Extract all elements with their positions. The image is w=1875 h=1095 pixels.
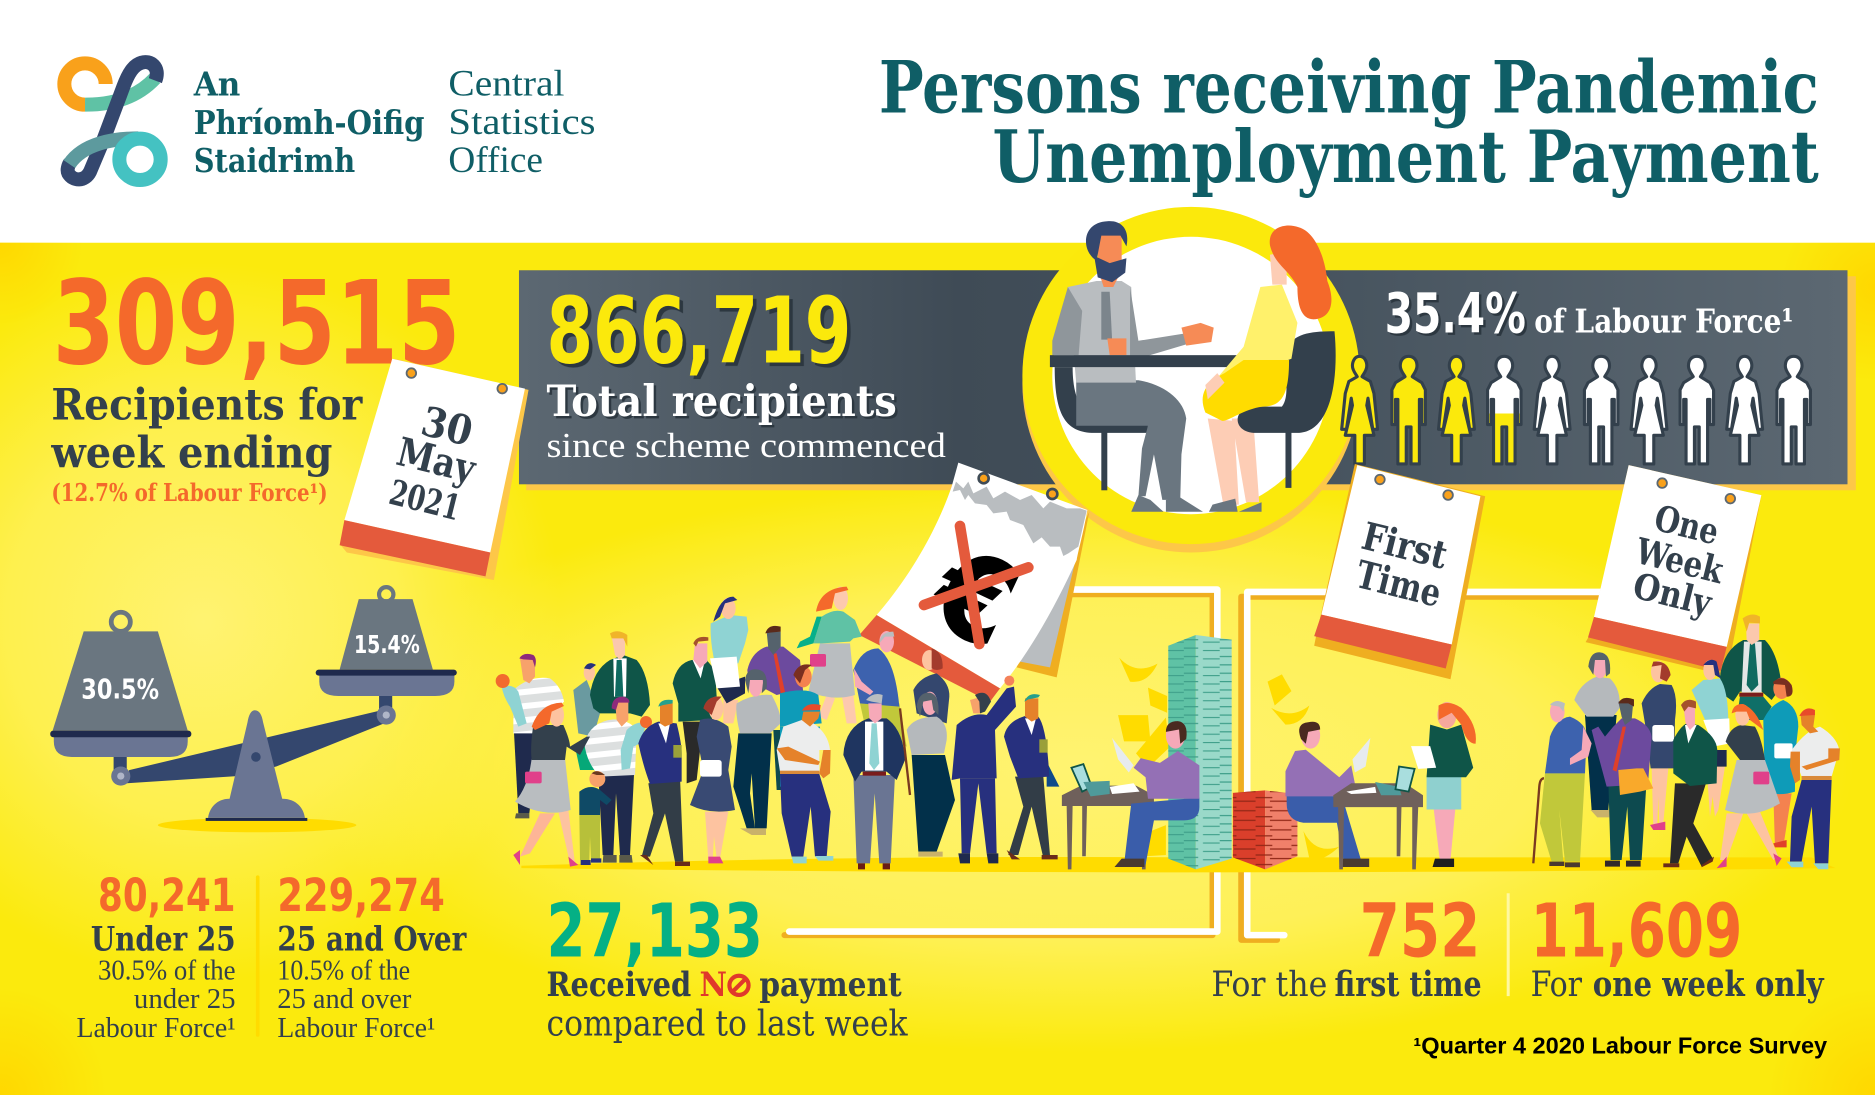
divider: age groups bbox=[256, 875, 259, 1037]
right weight 15.4%: 15.4% bbox=[354, 630, 420, 659]
person: woman with teal top and white bag bbox=[710, 597, 748, 723]
logo text: English name: Office bbox=[448, 140, 543, 181]
seated man bbox=[1124, 798, 1199, 865]
person: woman in grey top bbox=[907, 692, 955, 857]
left weight 30.5%: 30.5% bbox=[81, 673, 159, 705]
person: man in blue suit with raised arm bbox=[952, 676, 1016, 863]
stats: under 25: under 25 bbox=[134, 983, 236, 1015]
calendar: no payment with crossed euro bbox=[859, 463, 1089, 702]
stat: no payment bbox=[546, 889, 908, 1045]
calendar: One Week Only: One bbox=[1650, 497, 1723, 553]
person: striped man with baby bbox=[496, 654, 564, 818]
paper held bbox=[1112, 738, 1134, 772]
stats: under 25: 80,241 bbox=[98, 869, 236, 922]
illustration: right desk worker bbox=[1285, 702, 1476, 869]
total recipients text: 866,719 bbox=[546, 277, 851, 384]
paper stack: green bbox=[1168, 635, 1232, 869]
calendar: One Week Only bbox=[1586, 465, 1761, 676]
title: Persons receiving Pandemic bbox=[879, 45, 1819, 129]
logo text: English name: Central bbox=[448, 64, 564, 105]
total recipients text: since scheme commenced bbox=[546, 427, 946, 465]
icon: logo knot bbox=[64, 62, 161, 180]
stats: 25 and over: 25 and Over bbox=[277, 920, 467, 959]
stat: first time: 752 bbox=[1360, 889, 1480, 975]
stat: one week only bbox=[1531, 889, 1824, 1005]
total recipients text: Total recipients bbox=[546, 377, 897, 427]
desk bbox=[1333, 783, 1423, 869]
stat: no payment: 27,133 bbox=[546, 889, 763, 975]
right weight 15.4% bbox=[316, 587, 457, 725]
labour force share text: 35.4% bbox=[1385, 281, 1526, 345]
stat: one week only: 11,609 bbox=[1531, 889, 1742, 975]
person: older man in blue t-shirt bbox=[853, 631, 907, 747]
headline: 309,515 recipients: (12.7% of Labour Force¹) bbox=[51, 479, 328, 507]
stat: first time: For the bbox=[1211, 965, 1327, 1005]
calendar: First Time: First bbox=[1357, 514, 1452, 579]
seated man bbox=[1287, 795, 1362, 863]
stat: one week only: For bbox=[1531, 965, 1582, 1005]
calendar: 30 May 2021: 30 bbox=[417, 397, 478, 456]
scale fulcrum bbox=[206, 710, 307, 821]
headline: 309,515 recipients: week ending bbox=[50, 429, 332, 479]
person: man in purple jacket bbox=[747, 626, 803, 790]
person: man in purple jacket with folder bbox=[1592, 698, 1653, 867]
logo text: Irish name: An bbox=[193, 66, 240, 104]
calendar: 30 May 2021 bbox=[340, 359, 529, 580]
person: woman in grey top bbox=[1574, 652, 1620, 817]
calendar: First Time bbox=[1314, 464, 1485, 679]
stats: 25 and over: 229,274 bbox=[277, 869, 445, 922]
confetti: yellow papers bbox=[1118, 658, 1339, 860]
logo text: Irish name: Staidrimh bbox=[194, 142, 355, 180]
stats: 25 and over: Labour Force¹ bbox=[277, 1012, 435, 1044]
stat: no payment: N bbox=[700, 965, 727, 1004]
stats: under 25 bbox=[77, 869, 236, 1044]
icons: ten people pictogram bbox=[1342, 356, 1810, 464]
person: woman in navy dress bbox=[1642, 661, 1676, 830]
stat: first time bbox=[1211, 889, 1482, 1005]
headline: 309,515 recipients bbox=[50, 257, 460, 507]
labour force share text bbox=[1385, 281, 1794, 345]
title bbox=[879, 45, 1819, 199]
stats: under 25: Under 25 bbox=[91, 920, 236, 959]
logo text: English name: Statistics bbox=[448, 102, 596, 143]
stat: no payment: compared to last week bbox=[546, 1004, 908, 1045]
stats: under 25: 30.5% of the bbox=[98, 954, 236, 986]
person: striped man front bbox=[584, 697, 652, 863]
person: man in blue jacket right bbox=[1004, 694, 1059, 859]
calendar: 30 May 2021: 2021 bbox=[385, 472, 465, 529]
connector: left bracket line bbox=[784, 590, 1217, 935]
cane bbox=[900, 708, 910, 795]
stat: no payment: payment bbox=[759, 965, 902, 1004]
person: woman on phone with teal top bbox=[1692, 660, 1730, 817]
calendar: One Week Only: Only bbox=[1629, 565, 1717, 625]
labour force share text: of Labour Force¹ bbox=[1534, 302, 1794, 340]
desk bbox=[1062, 786, 1154, 869]
person: woman in teal dress bbox=[780, 664, 822, 787]
total recipients text bbox=[546, 277, 946, 465]
person: woman in navy top bbox=[913, 648, 949, 723]
illustration: weighing scale bbox=[50, 587, 457, 832]
person: woman on phone behind bbox=[573, 663, 600, 770]
stat: one week only: one week only bbox=[1593, 964, 1824, 1005]
illustration: right crowd bbox=[1533, 615, 1840, 869]
calendar: One Week Only: Week bbox=[1631, 530, 1728, 592]
stats: under 25: Labour Force¹ bbox=[77, 1012, 236, 1044]
stat: first time: first time bbox=[1335, 964, 1482, 1005]
person: man in blue jacket bbox=[638, 700, 690, 866]
woman seated bbox=[1203, 225, 1336, 512]
cross bbox=[924, 526, 1028, 644]
person: man in white shirt bbox=[1787, 708, 1840, 869]
person: man in white shirt bbox=[777, 704, 833, 863]
calendar: 30 May 2021: May bbox=[392, 429, 481, 493]
person: old man with cane bbox=[1533, 701, 1592, 867]
scale shadow bbox=[158, 818, 356, 832]
person: man in green jacket bbox=[673, 637, 717, 783]
illustration: interview circle bbox=[1022, 207, 1360, 552]
laptop bbox=[1071, 764, 1140, 796]
table bbox=[1050, 355, 1247, 367]
calendar: First Time: Time bbox=[1351, 552, 1446, 617]
torn grey edge bbox=[953, 482, 1087, 556]
connector: right bracket line bbox=[1241, 592, 1617, 940]
person: tall man in green suit bbox=[590, 631, 650, 717]
illustration: left desk worker bbox=[1062, 721, 1199, 869]
stats: 25 and over: 10.5% of the bbox=[277, 954, 410, 986]
panel: dark banner bbox=[519, 270, 1856, 490]
logo: Central Statistics Office bbox=[64, 62, 596, 181]
man seated at table bbox=[1052, 221, 1214, 512]
person: tall man in green suit bbox=[1720, 615, 1782, 720]
laptop bbox=[1346, 767, 1415, 795]
person: man in green jacket and black trousers bbox=[1663, 700, 1717, 867]
footnote: ¹Quarter 4 2020 Labour Force Survey bbox=[1413, 1033, 1828, 1059]
headline: 309,515 recipients: 309,515 bbox=[53, 257, 460, 392]
divider: first time and one week bbox=[1507, 893, 1510, 996]
stats: 25 and over: 25 and over bbox=[277, 983, 412, 1015]
person: child bbox=[579, 771, 612, 865]
illustration: left crowd, part one bbox=[496, 597, 803, 867]
illustration: left crowd, part two bbox=[777, 587, 1059, 869]
logo text: English name bbox=[448, 64, 596, 181]
person: woman in teal dress bbox=[1763, 678, 1798, 847]
paper stack: red bbox=[1233, 790, 1297, 869]
left weight 30.5% bbox=[50, 612, 191, 786]
paper held bbox=[1352, 738, 1370, 772]
headline: 309,515 recipients: Recipients for bbox=[51, 381, 363, 431]
person: woman in navy dress with white bag bbox=[690, 696, 735, 863]
stats: 25 and over bbox=[277, 869, 467, 1044]
logo text: Irish name bbox=[193, 66, 425, 180]
person: woman in grey top and dark trousers bbox=[733, 669, 781, 835]
stat: no payment: Received bbox=[546, 965, 691, 1004]
logo text: Irish name: Phríomh-Oifig bbox=[194, 104, 425, 142]
person: woman with red hair and grey skirt bbox=[513, 703, 590, 867]
woman standing bbox=[1434, 810, 1455, 860]
person: woman with green top and grey skirt bbox=[797, 587, 862, 723]
icon: euro sign: € bbox=[912, 522, 1036, 675]
person: woman with grey skirt bbox=[1717, 704, 1782, 868]
ground strip bbox=[521, 857, 1836, 872]
scale beam bbox=[127, 710, 384, 783]
person: man in navy suit and grey trousers bbox=[843, 694, 905, 869]
title: Unemployment Payment bbox=[993, 115, 1819, 199]
icon: no sign bbox=[729, 976, 749, 995]
